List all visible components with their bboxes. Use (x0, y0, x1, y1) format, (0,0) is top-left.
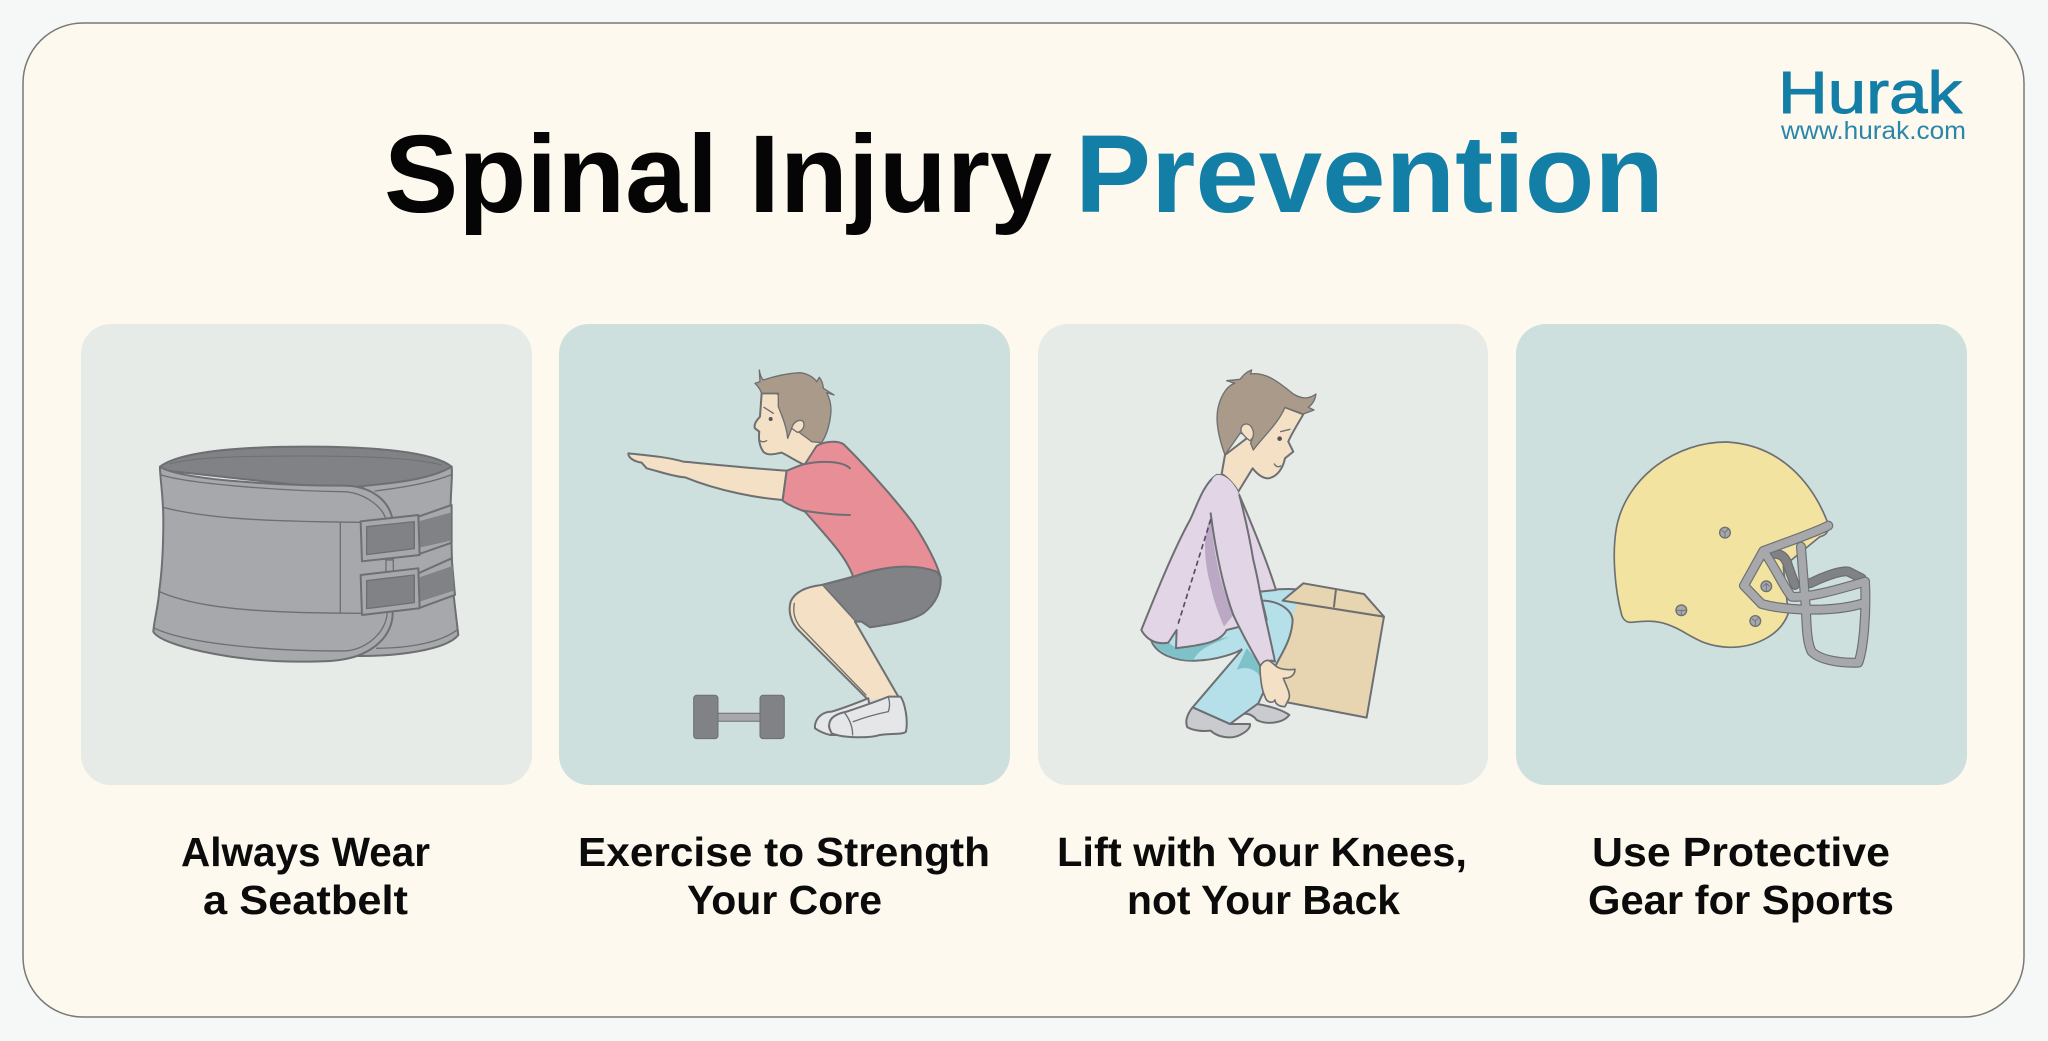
title: Spinal Injury (384, 113, 1052, 236)
labels: Gear for Sports (1588, 877, 1894, 923)
icon: dumbbell (694, 695, 784, 739)
labels (181, 829, 1894, 923)
title: Prevention (1075, 113, 1664, 236)
logo: Hurak (1778, 60, 1963, 126)
labels: Exercise to Strength (578, 829, 990, 875)
labels: Always Wear (181, 829, 430, 875)
panel: protective gear (1516, 324, 1967, 785)
logo: www.hurak.com (1780, 117, 1966, 145)
icon: squatting man with dumbbell (628, 370, 941, 739)
panel: seatbelt (81, 324, 532, 785)
labels: Your Core (687, 877, 882, 923)
panel: exercise (559, 324, 1010, 785)
icon: football helmet (1614, 442, 1865, 663)
labels: a Seatbelt (203, 877, 408, 923)
labels: Use Protective (1592, 829, 1890, 875)
icon: face mask (1744, 526, 1865, 663)
panel: lifting (1038, 324, 1488, 785)
title (384, 113, 1664, 236)
logo (1778, 60, 1966, 145)
labels: Lift with Your Knees, (1057, 829, 1467, 875)
labels: not Your Back (1127, 877, 1400, 923)
icon: man lifting box (1141, 370, 1384, 737)
icon: belt (153, 447, 458, 662)
